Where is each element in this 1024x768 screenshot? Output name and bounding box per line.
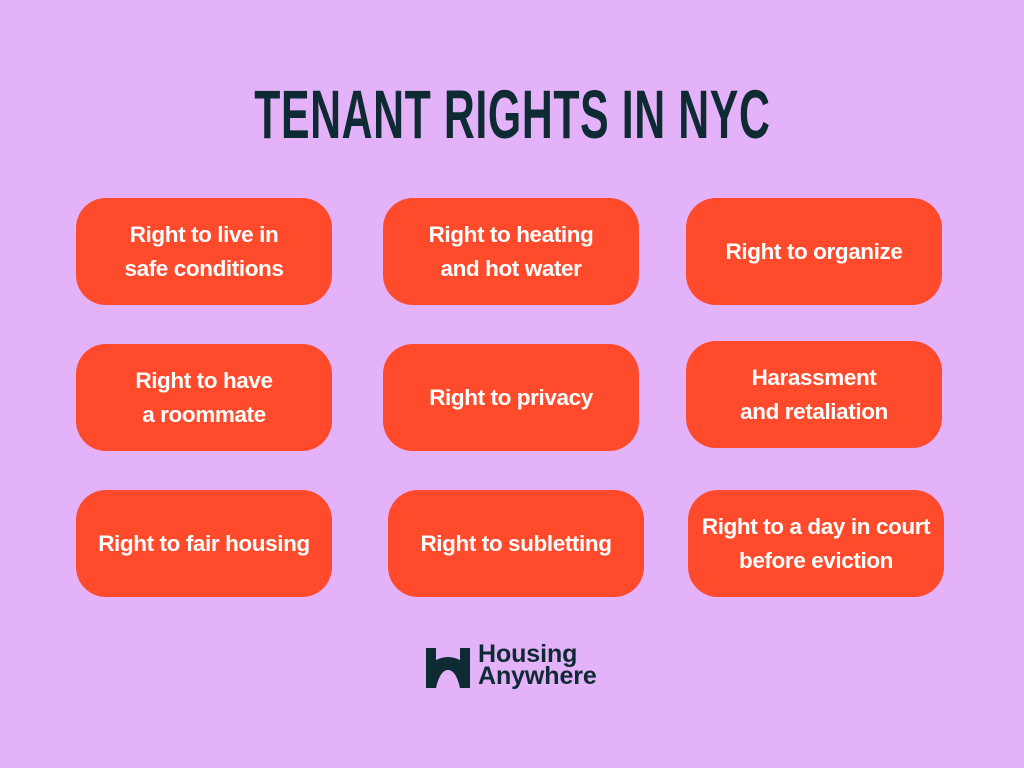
box: fair housing [76, 490, 332, 597]
box: organize: Right to organize [726, 238, 902, 264]
box: organize [686, 198, 942, 305]
icon: logo mark [426, 648, 470, 688]
box: court [688, 490, 944, 597]
title: TENANT RIGHTS IN NYC [254, 76, 770, 153]
box: heating [383, 198, 639, 305]
box: subletting [388, 490, 644, 597]
box: court: Right to a day in court [702, 514, 930, 538]
box: privacy [383, 344, 639, 451]
box: court: before eviction [739, 548, 893, 572]
box: harassment: and retaliation [740, 398, 888, 424]
logo text: Housing [478, 640, 577, 668]
logo text [478, 640, 597, 690]
box: safe conditions [76, 198, 332, 305]
box: safe conditions: Right to live in [130, 222, 278, 246]
box: heating: and hot water [440, 256, 582, 280]
box: harassment: Harassment [752, 364, 876, 390]
logo text: Anywhere [478, 662, 597, 690]
box: roommate: a roommate [142, 402, 266, 426]
box: fair housing: Right to fair housing [98, 530, 310, 556]
box: heating: Right to heating [429, 222, 593, 246]
box: privacy: Right to privacy [429, 384, 593, 410]
box: roommate [76, 344, 332, 451]
box: subletting: Right to subletting [420, 530, 612, 556]
logo [426, 640, 597, 690]
box: roommate: Right to have [135, 368, 273, 392]
box: harassment [686, 341, 942, 448]
box: safe conditions: safe conditions [124, 256, 284, 280]
